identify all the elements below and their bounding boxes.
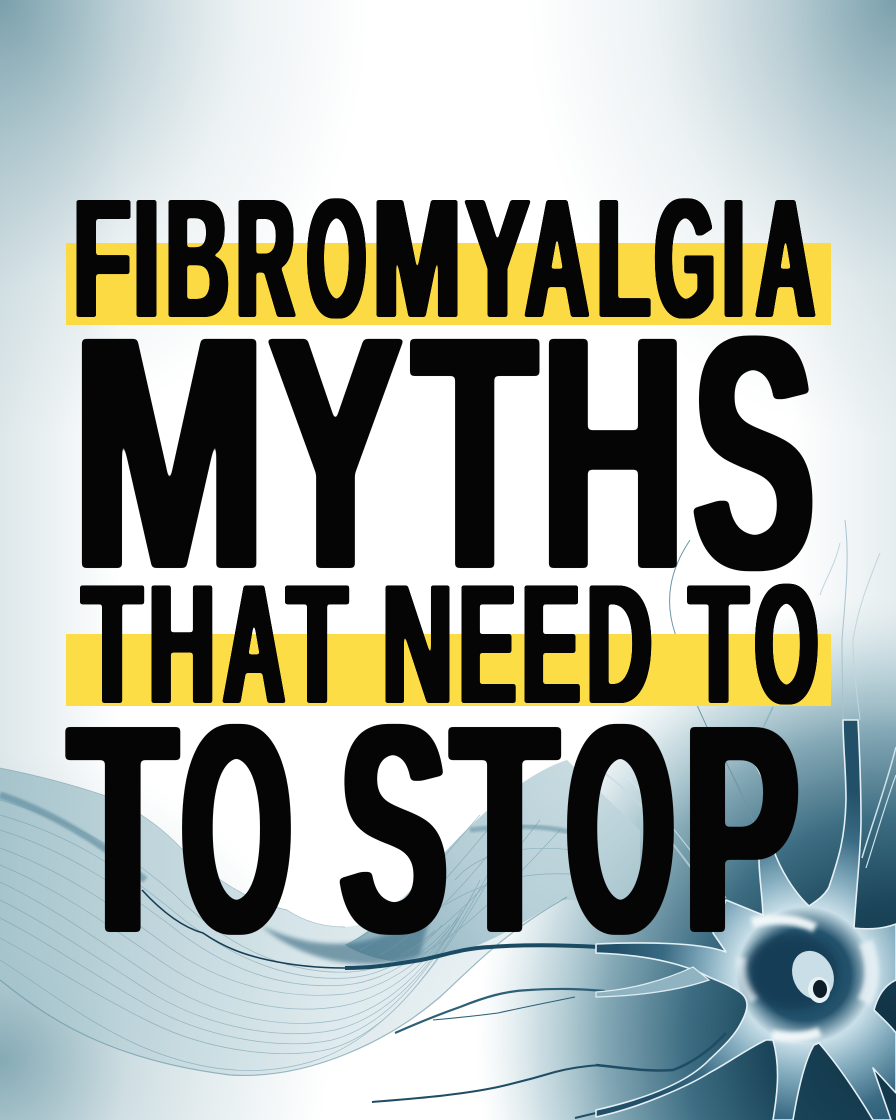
title line: Fibromyalgia: O — [307, 164, 366, 354]
title line: Myths: T — [413, 267, 537, 639]
title line: That Need To: H — [148, 549, 216, 740]
title line: Myths: H — [540, 267, 685, 639]
cell body core — [746, 934, 838, 1010]
title line: That Need To: A — [223, 549, 285, 740]
title line: Fibromyalgia: I — [133, 164, 160, 354]
title line: To Stop: O — [181, 663, 292, 996]
title line: To Stop: S — [340, 663, 448, 996]
text: O — [755, 549, 818, 740]
title line: Fibromyalgia: M — [372, 164, 462, 354]
cell body glow — [742, 920, 872, 1037]
title: A — [756, 164, 815, 354]
title line: To Stop: O — [566, 663, 675, 996]
title line: Fibromyalgia: Y — [465, 164, 530, 354]
title line: That Need To: E — [522, 549, 580, 740]
title line: To Stop: P — [683, 663, 799, 996]
title line: That Need To: D — [586, 549, 652, 740]
title line: That Need To: T — [287, 549, 347, 740]
title line: Fibromyalgia: A — [525, 164, 589, 354]
title line: That Need To: T — [689, 549, 748, 740]
title line: To Stop: T — [68, 663, 177, 996]
title line: Fibromyalgia: I — [722, 164, 745, 354]
title line: That Need To: E — [459, 549, 516, 740]
title line: Myths: M — [71, 267, 267, 639]
title line: Fibromyalgia: B — [166, 164, 229, 354]
thin branch — [596, 1033, 726, 1071]
title line: Fibromyalgia: R — [236, 164, 295, 354]
title line: Myths: Y — [269, 267, 402, 639]
title line: To Stop: T — [451, 663, 558, 996]
title line: Fibromyalgia: G — [655, 164, 716, 354]
thin nerve fibres — [670, 520, 896, 868]
icon: neuron — [596, 720, 896, 1120]
title line: That Need To: N — [382, 549, 453, 740]
wave ribbon — [0, 760, 726, 1118]
lower left branch — [596, 967, 709, 997]
title line: That Need To: T — [82, 549, 142, 740]
yellow highlight band: That Need To — [66, 634, 831, 706]
title line: Fibromyalgia: L — [597, 164, 650, 354]
title — [68, 164, 818, 996]
title line: Fibromyalgia: F — [73, 164, 131, 354]
nucleus — [784, 944, 842, 1006]
dendrites and cell silhouette — [596, 720, 896, 1120]
yellow highlight band: Fibromyalgia — [66, 243, 831, 325]
